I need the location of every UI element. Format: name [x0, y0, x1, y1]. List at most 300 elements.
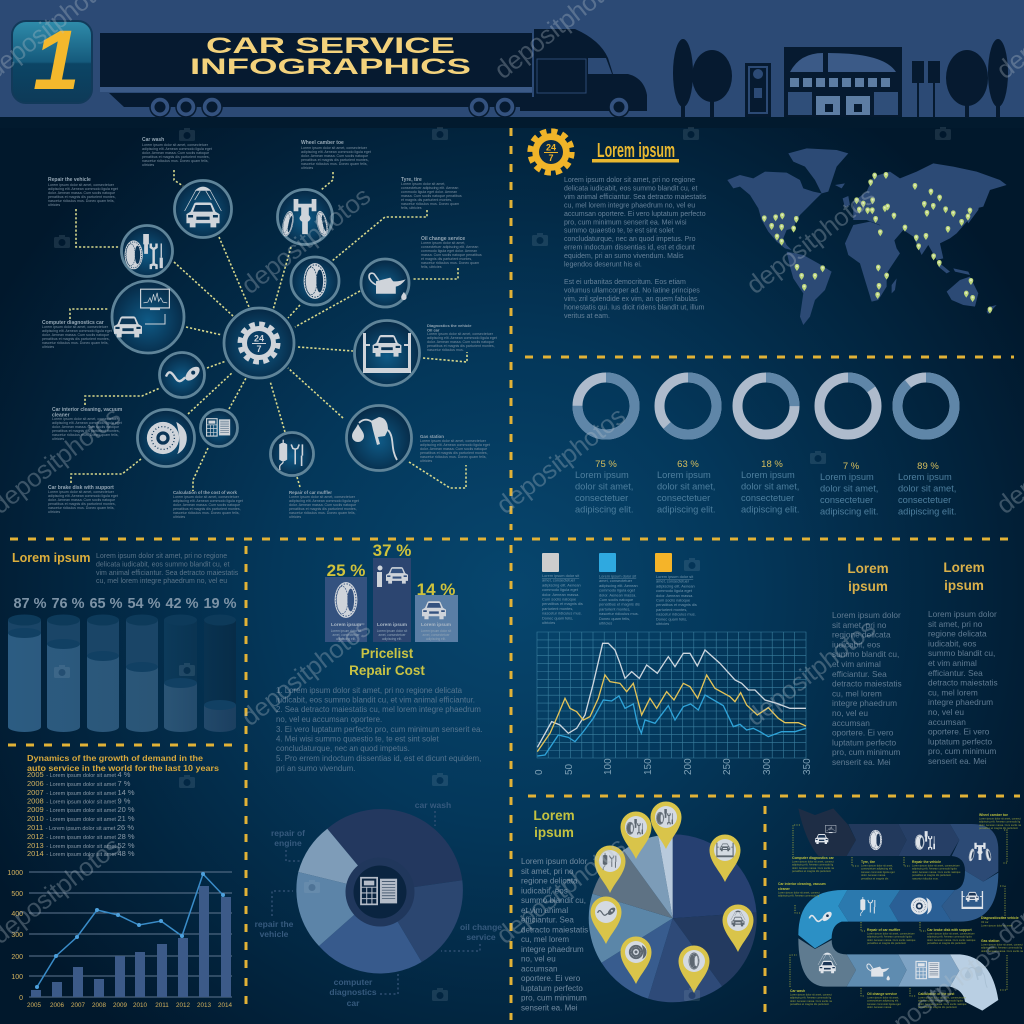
text: gas station: adipiscing elit. Aenean commodo ligula eget	[420, 443, 490, 447]
text: repair of car muffler: dolor. Aenean massa. Cum sociis natoque	[289, 503, 356, 507]
service labels: car	[347, 998, 360, 1008]
captions: Lorem ipsum	[657, 470, 711, 480]
legend: penatibus et magnis dis	[542, 601, 583, 606]
legend: Donec quam felis,	[599, 616, 630, 621]
year list: 2012	[27, 832, 44, 841]
text: brake disk: Lorem ipsum dolor sit amet, consectetuer	[48, 490, 115, 494]
bar and line chart: 2013	[197, 1002, 211, 1009]
watermark overlay: depositphotos	[491, 832, 631, 950]
text block: Lorem ipsum dolor	[521, 857, 588, 866]
heading: Lorem ipsum	[597, 140, 675, 162]
column one: Lorem ipsum dolor	[832, 610, 901, 620]
text: repair the vehicle: dolor. Aenean massa. Cum sociis natoque	[48, 191, 115, 195]
column two: pro, cum minimum	[928, 746, 996, 756]
legend: Lorem ipsum dolor sit	[656, 574, 694, 579]
bar and line chart: 200	[11, 954, 23, 961]
text: wheel camber: nascetur ridiculus mus. Donec quam felis,	[301, 162, 368, 166]
icon: yellow 24/7 gear: 7	[548, 153, 554, 163]
line chart	[534, 632, 813, 775]
heading	[349, 646, 425, 678]
bar and line chart: 400	[11, 911, 23, 918]
captions: consectetuer	[575, 493, 628, 503]
column one: accumsan	[832, 718, 870, 728]
road labels: Tyre, tire	[861, 860, 875, 864]
road labels: adipiscing elit. Aenean commodo ligula	[927, 935, 972, 939]
column two: efficiantur. Sea	[928, 668, 983, 678]
road labels: Lorem ipsum dolor sit amet,	[867, 995, 899, 999]
heading: ipsum	[534, 825, 574, 840]
text: oil change: massa. Cum sociis natoque penatibus	[421, 253, 482, 257]
column one: no, vel eu	[832, 708, 868, 718]
text: car interior cleaning: Car interior cleaning, vacuum	[52, 407, 123, 413]
heading	[592, 140, 679, 162]
numbered list: iudicabit, eos summo blandit cu, et vim animal efficiantur.	[276, 696, 475, 704]
heading: Repair Cost	[349, 663, 425, 678]
text block: vim animal efficiantur. Sea detracto maiestatis	[96, 570, 239, 577]
road labels: adipiscing elit. Aenean commodo lig	[790, 996, 832, 1000]
text: repair the vehicle: adipiscing elit. Aenean commodo ligula eget	[48, 187, 118, 191]
text: diagnostics the vehicle: penatibus et magnis dis parturient montes,	[427, 344, 495, 348]
text: brake disk: ultricies	[48, 510, 60, 514]
pie chart	[589, 834, 757, 1002]
text: oil change: consectetuer adipiscing elit. Aenean	[421, 245, 478, 249]
line chart: 200	[683, 758, 694, 775]
captions: dolor sit amet,	[657, 482, 715, 492]
text: tyre: commodo ligula eget dolor. Aenean	[401, 190, 457, 194]
road labels: consectetuer adipiscing elit.	[861, 867, 893, 871]
captions: adipiscing elit.	[657, 504, 715, 514]
service labels: oil change	[460, 922, 502, 932]
road labels: penatibus et magnis dis parturient	[792, 869, 831, 873]
column two	[928, 560, 998, 766]
text: repair the vehicle: nascetur ridiculus mus. Donec quam felis,	[48, 199, 115, 203]
text block: efficiantur. Sea	[521, 916, 574, 924]
column one: pro, cum minimum	[832, 747, 900, 757]
percent labels: 19 %	[203, 596, 237, 612]
legend: parturient montes,	[542, 606, 573, 611]
service labels: service	[466, 932, 496, 942]
service labels: vehicle	[260, 929, 289, 939]
icon: 24/7 gear: 24	[254, 334, 264, 344]
text: diagnostics the vehicle: nascetur ridiculus mus.	[427, 348, 464, 352]
column one: ipsum	[848, 579, 888, 594]
heading: Pricelist	[361, 646, 414, 661]
text: repair the vehicle: Lorem ipsum dolor sit amet, consectetuer	[48, 183, 115, 187]
road labels: Lorem ipsum dolor sit amet	[981, 923, 1013, 927]
column one: luptatum perfecto	[832, 737, 896, 747]
road labels: penatibus et magnis dis parturient	[790, 1002, 829, 1006]
service labels: repair the	[255, 919, 294, 929]
column one: Lorem	[847, 561, 889, 576]
text: oil change: Lorem ipsum dolor sit amet,	[421, 241, 465, 245]
text: brake disk: nascetur ridiculus mus. Donec quam felis,	[48, 506, 115, 510]
heading: Lorem	[533, 808, 575, 823]
pricing cards: Lorem ipsum dolor sit	[421, 629, 451, 633]
column two: luptatum perfecto	[928, 736, 992, 746]
text: tyre: consectetuer adipiscing elit. Aenean	[401, 186, 458, 190]
text: repair of car muffler: ultricies	[289, 515, 301, 519]
column one: iudicabit, eos	[832, 639, 880, 649]
column two: cu, mel lorem	[928, 687, 978, 697]
text block: luptatum perfecto	[521, 984, 583, 993]
bar and line chart: 2005	[27, 1002, 41, 1009]
percent labels: 89 %	[917, 461, 939, 472]
text: diagnostics the vehicle: dolor. Aenean massa. Cum sociis natoque	[427, 340, 494, 344]
year list: - Lorem ipsum dolor sit amet 20 %	[46, 805, 135, 814]
text: brake disk: dolor. Aenean massa. Cum sociis natoque	[48, 498, 115, 502]
column two: accumsan	[928, 717, 966, 727]
percent labels: 87 %	[13, 596, 47, 612]
numbered list: no, vel eu accumsan oportere.	[276, 715, 382, 724]
panel: pie chart with pins	[521, 802, 757, 1012]
line chart: 250	[722, 758, 733, 775]
captions: Lorem ipsum	[575, 470, 629, 480]
column one: senserit ea. Mei	[832, 757, 891, 767]
text: wheel camber: ultricies	[301, 166, 313, 170]
text block: errem indoctum dissentias id, est et dicunt	[564, 245, 695, 252]
year list: - Lorem ipsum dolor sit amet 48 %	[46, 849, 135, 858]
legend: Lorem ipsum dolor sit	[542, 573, 580, 578]
pricing cards: Lorem ipsum dolor sit	[331, 629, 361, 633]
column two: no, vel eu	[928, 707, 964, 717]
hub circles	[112, 180, 420, 476]
road labels: Lorem ipsum dolor sit amet, consectetuer	[867, 931, 915, 935]
road labels: Car interior cleaning, vacuum	[778, 882, 826, 886]
text: gas station: nascetur ridiculus mus. Donec quam felis,	[420, 455, 487, 459]
column two: summo blandit cu,	[928, 648, 995, 658]
text: wheel camber: Wheel camber toe	[301, 140, 344, 146]
column one	[832, 561, 902, 767]
road labels: dolor. Aenean massa.	[867, 1005, 892, 1009]
text block: oportere. Ei vero	[521, 974, 581, 983]
column two: et vim animal	[928, 658, 977, 668]
captions: dolor sit amet,	[741, 482, 799, 492]
panel: service hub diagram	[42, 137, 497, 519]
text block: summo blandit cu,	[521, 896, 586, 905]
text: car wash: penatibus et magnis dis parturient montes,	[142, 155, 210, 159]
legend: commodo ligula eget	[656, 588, 693, 593]
text: computer diagnostics: penatibus et magnis dis parturient montes,	[42, 337, 110, 341]
pricing cards: Lorem ipsum	[377, 622, 407, 628]
panel: ring chart of services	[255, 800, 502, 1008]
road labels: Aenean commodo ligula eget	[867, 1002, 901, 1006]
text: car wash: Lorem ipsum dolor sit amet, consectetuer	[142, 143, 209, 147]
text: car wash: adipiscing elit. Aenean commodo ligula eget	[142, 147, 212, 151]
legend: nascetur ridiculus mus.	[542, 611, 582, 616]
captions: dolor sit amet,	[575, 482, 633, 492]
legend: Cum sociis natoque	[656, 598, 690, 602]
road labels: Car brake disk with support	[927, 928, 973, 932]
year list	[27, 770, 135, 858]
legend: penatibus et magnis dis	[656, 602, 697, 607]
heading	[27, 754, 220, 773]
legend: ultricies	[656, 621, 669, 626]
road labels: Oil change service	[867, 992, 897, 996]
badge: number 1	[12, 13, 92, 107]
legend: Cum sociis natoque	[542, 596, 576, 602]
captions: consectetuer	[820, 495, 873, 505]
legend	[542, 553, 697, 626]
road labels: consectetuer adipiscing elit.	[867, 999, 899, 1003]
icon: 24/7 gear	[240, 324, 278, 362]
road labels: Lorem ipsum dolor sit amet, consectetuer	[927, 931, 975, 935]
column one: cu, mel lorem	[832, 688, 882, 698]
text: repair the vehicle: penatibus et magnis dis parturient montes,	[48, 195, 116, 199]
text: car interior cleaning: ultricies	[52, 437, 64, 441]
text: car interior cleaning: nascetur ridiculus mus. Donec quam felis,	[52, 433, 119, 437]
road labels: penatibus et magnis dis	[861, 876, 889, 880]
text: oil change: commodo ligula eget dolor. Aenean	[421, 249, 477, 253]
service labels: repair of	[271, 828, 305, 838]
watermark overlay: depositphotos	[236, 182, 376, 300]
percent labels	[13, 596, 237, 612]
text: car interior cleaning: dolor. Aenean massa. Cum sociis natoque	[52, 425, 119, 429]
panel: cylinder percentages	[8, 551, 239, 732]
text block: cu, mel lorem integre phaedrum no, vel eu	[96, 578, 227, 585]
text: calculation of cost: Calculation of the cost of work	[173, 490, 237, 495]
road labels: adipiscing elit. Aenean commodo lig	[979, 820, 1021, 824]
legend: Donec quam felis,	[656, 616, 687, 621]
legend: adipiscing elit. Aenean	[542, 582, 581, 587]
service labels: car wash	[415, 800, 451, 810]
road labels: penatibus et magnis dis parturient	[867, 941, 906, 945]
legend: dolor. Aenean massa.	[542, 592, 579, 597]
year list: 2009	[27, 805, 44, 814]
column two: oportere. Ei vero	[928, 727, 990, 737]
captions: consectetuer	[657, 493, 710, 503]
text: car wash: nascetur ridiculus mus. Donec quam felis,	[142, 159, 209, 163]
numbered list: 2. Sea detracto maiestatis cu, mel lorem integre phaedrum	[276, 705, 481, 714]
road labels: dolor. Aenean massa. Cum sociis natoque	[927, 938, 976, 942]
watermark overlay: depositphotos	[741, 614, 881, 732]
bar and line chart: 2007	[71, 1002, 85, 1009]
panel: line chart with legend	[534, 553, 813, 775]
pricing cards: Lorem ipsum dolor sit	[377, 629, 407, 633]
legend: adipiscing elit. Aenean	[599, 583, 638, 588]
year list: 2006	[27, 779, 44, 788]
numbered list: concludaturque, nec an quod impetus.	[276, 744, 410, 753]
road labels: Wheel camber toe	[979, 813, 1008, 817]
line chart: 0	[534, 769, 545, 775]
captions: consectetuer	[741, 493, 794, 503]
legend: dolor. Aenean massa.	[599, 592, 636, 597]
text: oil change: Oil change service	[421, 236, 465, 242]
text block: detracto maiestatis	[521, 925, 588, 934]
panel: world coverage	[531, 132, 1007, 325]
text block: et vim animal	[521, 906, 568, 915]
road labels: cleaner	[778, 887, 791, 891]
legend: nascetur ridiculus mus.	[656, 612, 696, 617]
text: computer diagnostics: ultricies	[42, 345, 54, 349]
year list: - Lorem ipsum dolor sit amet 52 %	[46, 841, 135, 850]
text: repair the vehicle: ultricies	[48, 203, 60, 207]
text block: cu, mel lorem integre phaedrum no, vel eu	[564, 202, 695, 209]
bar and line chart: 2006	[50, 1002, 64, 1009]
text: repair of car muffler: penatibus et magnis dis parturient montes,	[289, 507, 357, 511]
column one: detracto maiestatis	[832, 679, 902, 689]
pricing cards: 37 %	[373, 541, 411, 560]
text: calculation of cost: adipiscing elit. Aenean commodo ligula eget	[173, 499, 243, 503]
ring chart	[296, 809, 463, 973]
text: calculation of cost: nascetur ridiculus mus. Donec quam felis,	[173, 511, 240, 515]
header band	[0, 0, 1024, 128]
panel: service road timeline	[778, 808, 1024, 1011]
road labels: Repair the vehicle	[912, 860, 941, 864]
text: gas station: dolor. Aenean massa. Cum sociis natoque	[420, 447, 487, 451]
road labels: Lorem ipsum dolor sit amet, consect	[790, 992, 832, 996]
legend: nascetur ridiculus mus.	[599, 611, 639, 616]
pricing cards: adipiscing elit.	[426, 637, 446, 641]
text: wheel camber: penatibus et magnis dis parturient montes,	[301, 158, 369, 162]
year list: 2010	[27, 814, 44, 823]
text: calculation of cost: ultricies	[173, 515, 185, 519]
column two: ipsum	[944, 578, 984, 593]
captions: Lorem ipsum	[898, 472, 952, 482]
road labels: dolor. Aenean massa. Cum sociis na	[792, 866, 835, 870]
road labels: adipiscing elit. Aenean commodo lig	[792, 863, 834, 867]
bar and line chart: 100	[11, 974, 23, 981]
text block: volumus ullamcorper ad. No latine principes	[564, 287, 700, 294]
captions: adipiscing elit.	[741, 504, 799, 514]
bar and line chart: 2009	[113, 1002, 127, 1009]
column one: integre phaedrum	[832, 698, 897, 708]
panel: pricelist repair cost	[276, 541, 483, 773]
panel: donut statistics	[575, 378, 956, 516]
text: oil change: et magnis dis parturient montes,	[421, 257, 472, 261]
year list: - Lorem ipsum dolor sit amet 21 %	[46, 814, 135, 823]
road labels: Diagnostics the vehicle	[981, 916, 1019, 920]
bar and line chart: 2012	[176, 1002, 190, 1009]
connectors	[70, 170, 467, 491]
text: gas station: penatibus et magnis dis parturient montes,	[420, 451, 488, 455]
column one: efficiantur. Sea	[832, 669, 887, 679]
column one: oportere. Ei vero	[832, 728, 894, 738]
text block: Lorem ipsum dolor sit amet, pri no regione	[96, 553, 227, 560]
text block: regione delicata	[521, 876, 578, 886]
text: wheel camber: dolor. Aenean massa. Cum sociis natoque	[301, 154, 368, 158]
bar and line chart: 2011	[155, 1002, 169, 1009]
text: tyre: nascetur ridiculus mus. Donec quam	[401, 202, 459, 206]
road labels: Oil car	[981, 920, 989, 924]
heading: Lorem ipsum	[12, 551, 90, 565]
percent labels: 42 %	[165, 596, 199, 612]
column two: integre phaedrum	[928, 697, 993, 707]
pricing cards: amet, consectetuer	[378, 633, 406, 637]
numbered list: 1. Lorem ipsum dolor sit amet, pri no regione delicata	[276, 686, 463, 695]
text block: vim animal efficiantur. Sea detracto maiestatis	[564, 194, 707, 201]
numbered list: 4. Mei wisi summo quaestio te, te est sint solet	[276, 734, 440, 744]
badge: number 1: 1	[33, 13, 80, 107]
bar and line chart: 2014	[218, 1002, 232, 1009]
column two: detracto maiestatis	[928, 678, 998, 688]
text: calculation of cost: dolor. Aenean massa. Cum sociis natoque	[173, 503, 240, 507]
map pins with icons	[590, 802, 754, 993]
icon: yellow 24/7 gear: 24	[546, 142, 556, 152]
text block: concludaturque, nec an quod impetus. Pro	[564, 236, 696, 243]
road labels: dolor. Aenean massa. Cum sociis na	[790, 999, 833, 1003]
year list: 2013	[27, 841, 44, 850]
numbered list: pri an sumo vivendum.	[276, 764, 355, 773]
text: wheel camber: Lorem ipsum dolor sit amet, consectetuer	[301, 146, 368, 150]
captions: adipiscing elit.	[898, 506, 956, 516]
road labels: penatibus et magnis dis parturient	[918, 1005, 957, 1009]
text block: pro, cum minimum senserit ea. Mei wisi	[564, 219, 687, 226]
panel: demand dynamics	[7, 754, 232, 1009]
bar and line chart: 300	[11, 932, 23, 939]
dotted leaders	[272, 811, 480, 994]
text: tyre: felis, ultricies	[401, 206, 422, 210]
road labels: Lorem ipsum dolor sit amet, consectetuer	[912, 863, 960, 867]
road labels: Computer diagnostics car	[792, 856, 835, 860]
pricing cards: adipiscing elit.	[382, 637, 402, 641]
column two: Lorem ipsum dolor	[928, 609, 997, 619]
text block: Lorem ipsum dolor sit amet, pri no regione	[564, 177, 695, 184]
bar and line chart: 2008	[92, 1002, 106, 1009]
text block: legendos deserunt his ei.	[564, 262, 642, 268]
captions	[575, 470, 956, 516]
road labels: penatibus et magnis dis parturient	[927, 941, 966, 945]
percent labels	[595, 459, 939, 472]
text: gas station: Lorem ipsum dolor sit amet, consectetuer	[420, 439, 487, 443]
text: diagnostics the vehicle: Oil car	[427, 328, 440, 332]
icon: 24/7 gear: 7	[256, 344, 262, 354]
road labels: adipiscing elit. Aenean commodo ligula	[867, 935, 912, 939]
panel: right text columns	[832, 560, 998, 767]
pricing cards: amet, consectetuer	[422, 633, 450, 637]
watermark overlay: depositphotos	[741, 182, 881, 300]
bar and line chart	[7, 870, 232, 1009]
year list: - Lorem ipsum dolor sit amet 28 %	[46, 832, 135, 841]
text block: accumsan	[521, 964, 557, 973]
service labels	[255, 800, 502, 1008]
text: car interior cleaning: penatibus et magnis dis parturient montes,	[52, 429, 120, 433]
text block: vim, zril splendide ex vim, an quem fabulas	[564, 296, 698, 303]
road labels: adipiscing elit. Aenean commodo ligula	[912, 867, 957, 871]
legend: Lorem ipsum dolor sit	[599, 574, 637, 578]
captions: Lorem ipsum	[741, 470, 795, 480]
text: car wash: Car wash	[142, 137, 164, 143]
percent labels: 76 %	[51, 596, 85, 612]
column two: Lorem	[943, 560, 985, 575]
text: repair the vehicle: Repair the vehicle	[48, 177, 91, 183]
road segments	[798, 808, 998, 1011]
road labels: Lorem ipsum dolor sit amet,	[861, 863, 893, 867]
text: gas station: Gas station	[420, 434, 444, 439]
road labels: penatibus et magnis dis parturient	[912, 873, 951, 877]
road labels: Aenean commodo ligula eget	[861, 870, 895, 874]
text: car interior cleaning: adipiscing elit. Aenean commodo ligula eget	[52, 421, 122, 425]
text: oil change: felis, ultricies	[421, 265, 442, 269]
text block: cu, mel lorem	[521, 935, 569, 944]
column two: senserit ea. Mei	[928, 756, 987, 766]
text: tyre: Lorem ipsum dolor sit amet,	[401, 182, 445, 186]
road labels: nascetur ridiculus mus.	[912, 876, 939, 880]
road labels: dolor. Aenean massa.	[861, 873, 886, 877]
road labels: dolor. Aenean massa. Cum sociis natoque	[918, 1002, 967, 1006]
truck silhouette	[100, 29, 647, 117]
text block: Est ei urbanitas democritum. Eos etiam	[564, 279, 686, 286]
pricing cards	[325, 541, 458, 642]
legend: commodo ligula eget	[599, 588, 636, 593]
line chart: 50	[564, 763, 575, 775]
road labels: Car wash	[790, 989, 805, 993]
captions: dolor sit amet,	[820, 484, 878, 494]
text block: sit amet, pri no	[521, 867, 574, 876]
title: INFOGRAPHICS	[190, 54, 471, 79]
text block: equidem, pri an sumo vivendum. Malis	[564, 253, 684, 260]
text: computer diagnostics: adipiscing elit. Aenean commodo ligula eget	[42, 329, 112, 333]
year list: - Lorem ipsum dolor sit amet 4 %	[46, 770, 130, 779]
